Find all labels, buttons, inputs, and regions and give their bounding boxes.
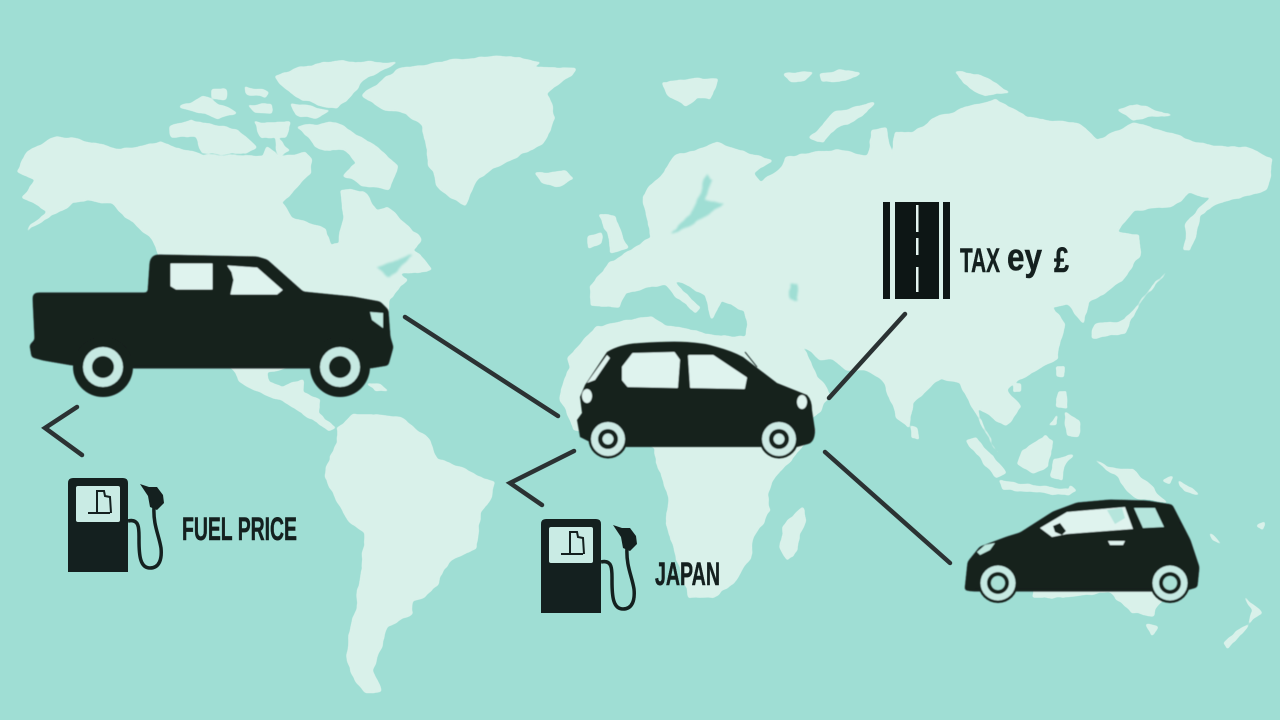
land: Kamchatka xyxy=(1185,197,1224,250)
icon: fuel pump centre xyxy=(541,519,637,613)
land: Iceland xyxy=(536,172,574,187)
land: Tasmania xyxy=(1146,624,1158,636)
land: North America xyxy=(17,137,432,430)
land: Greenland xyxy=(362,56,576,205)
land: Eurasia and Africa xyxy=(560,100,1272,598)
connector line: pickup to centre car xyxy=(405,317,558,416)
arrow: pickup to fuel pump xyxy=(45,407,82,455)
icon: fuel pump left xyxy=(68,478,164,572)
label: tax xyxy=(960,237,1069,280)
label: tax: £ xyxy=(1054,241,1069,280)
label: Japan: JAPAN xyxy=(655,556,720,592)
label: tax: ey xyxy=(1007,237,1042,279)
land: New Siberian islands xyxy=(1118,106,1171,119)
arrow: centre car to fuel pump xyxy=(510,451,574,505)
land: Japan xyxy=(1092,272,1166,337)
land: Svalbard xyxy=(661,78,718,105)
land: New Guinea and Pacific islands xyxy=(1095,460,1264,543)
land: Novaya Zemlya xyxy=(810,103,874,142)
label: tax: TAX xyxy=(960,242,1000,280)
land: Britain and Ireland xyxy=(587,215,627,253)
centre car xyxy=(577,342,815,458)
land: South America xyxy=(325,415,495,693)
land: Canadian Arctic islands xyxy=(170,61,398,190)
icon: road xyxy=(883,202,950,299)
land: Australia xyxy=(1033,505,1165,615)
land: Franz Josef islands xyxy=(785,70,860,82)
connector line: centre car to road tax xyxy=(829,314,905,398)
label: fuel price: FUEL PRICE xyxy=(182,511,297,547)
land: Severnaya Zemlya xyxy=(955,72,1010,95)
land: Sri Lanka and Taiwan xyxy=(911,366,1063,438)
inland seas xyxy=(378,175,797,300)
land: New Zealand xyxy=(1224,597,1262,649)
land: Indonesia and Philippines xyxy=(966,392,1079,495)
land: Cuba xyxy=(367,383,388,391)
hatchback car xyxy=(965,500,1199,603)
connector line: centre car to hatchback xyxy=(825,452,950,563)
land: Madagascar xyxy=(780,508,805,560)
pickup truck xyxy=(30,255,393,397)
